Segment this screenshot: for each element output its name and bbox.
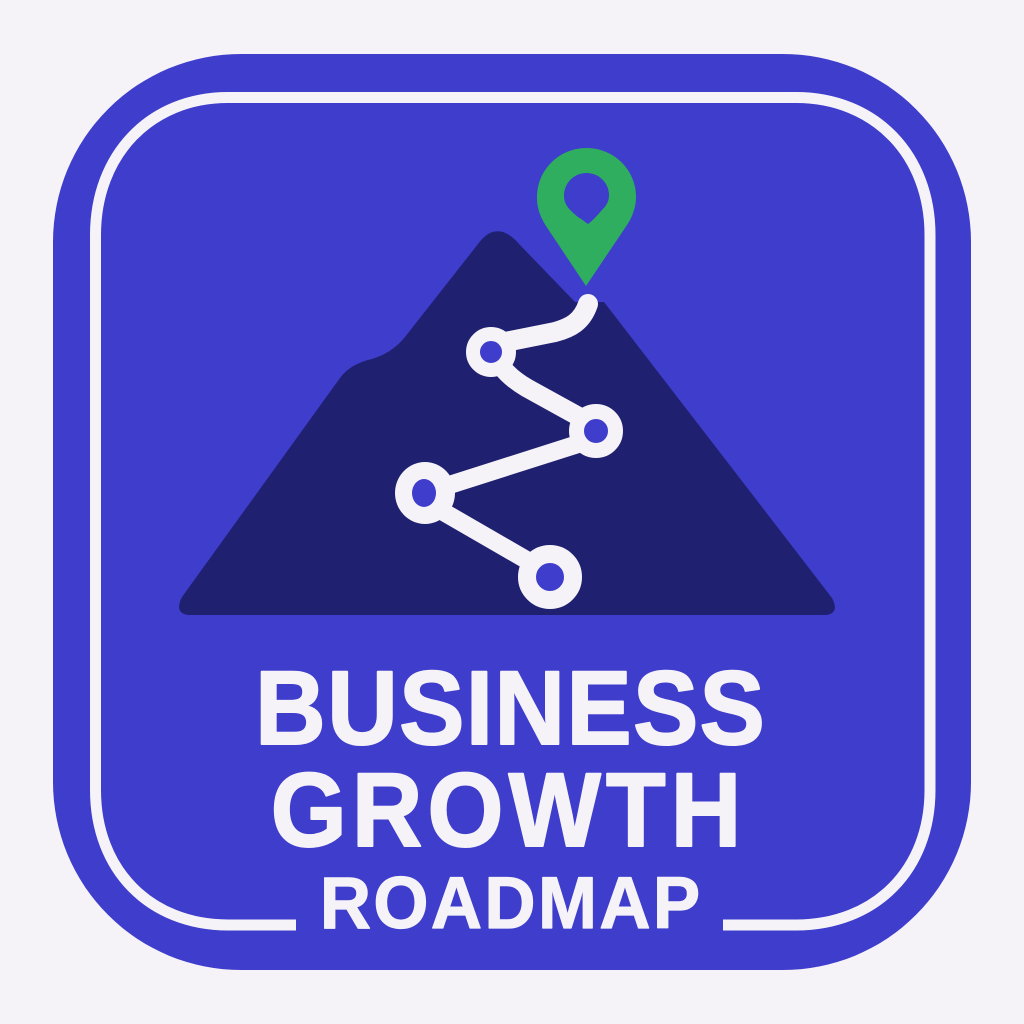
waypoint 3 <box>395 462 455 524</box>
waypoint 4 <box>527 554 573 600</box>
inner white border <box>96 98 930 925</box>
route path <box>395 304 616 600</box>
title: business: BUSINESS <box>255 650 765 767</box>
icon: location pin <box>537 148 636 286</box>
mountain <box>179 231 835 615</box>
waypoint 1 <box>473 334 509 370</box>
waypoint 2 <box>576 412 616 450</box>
title: growth: GROWTH <box>271 752 741 869</box>
subtitle: roadmap: ROADMAP <box>320 863 700 944</box>
